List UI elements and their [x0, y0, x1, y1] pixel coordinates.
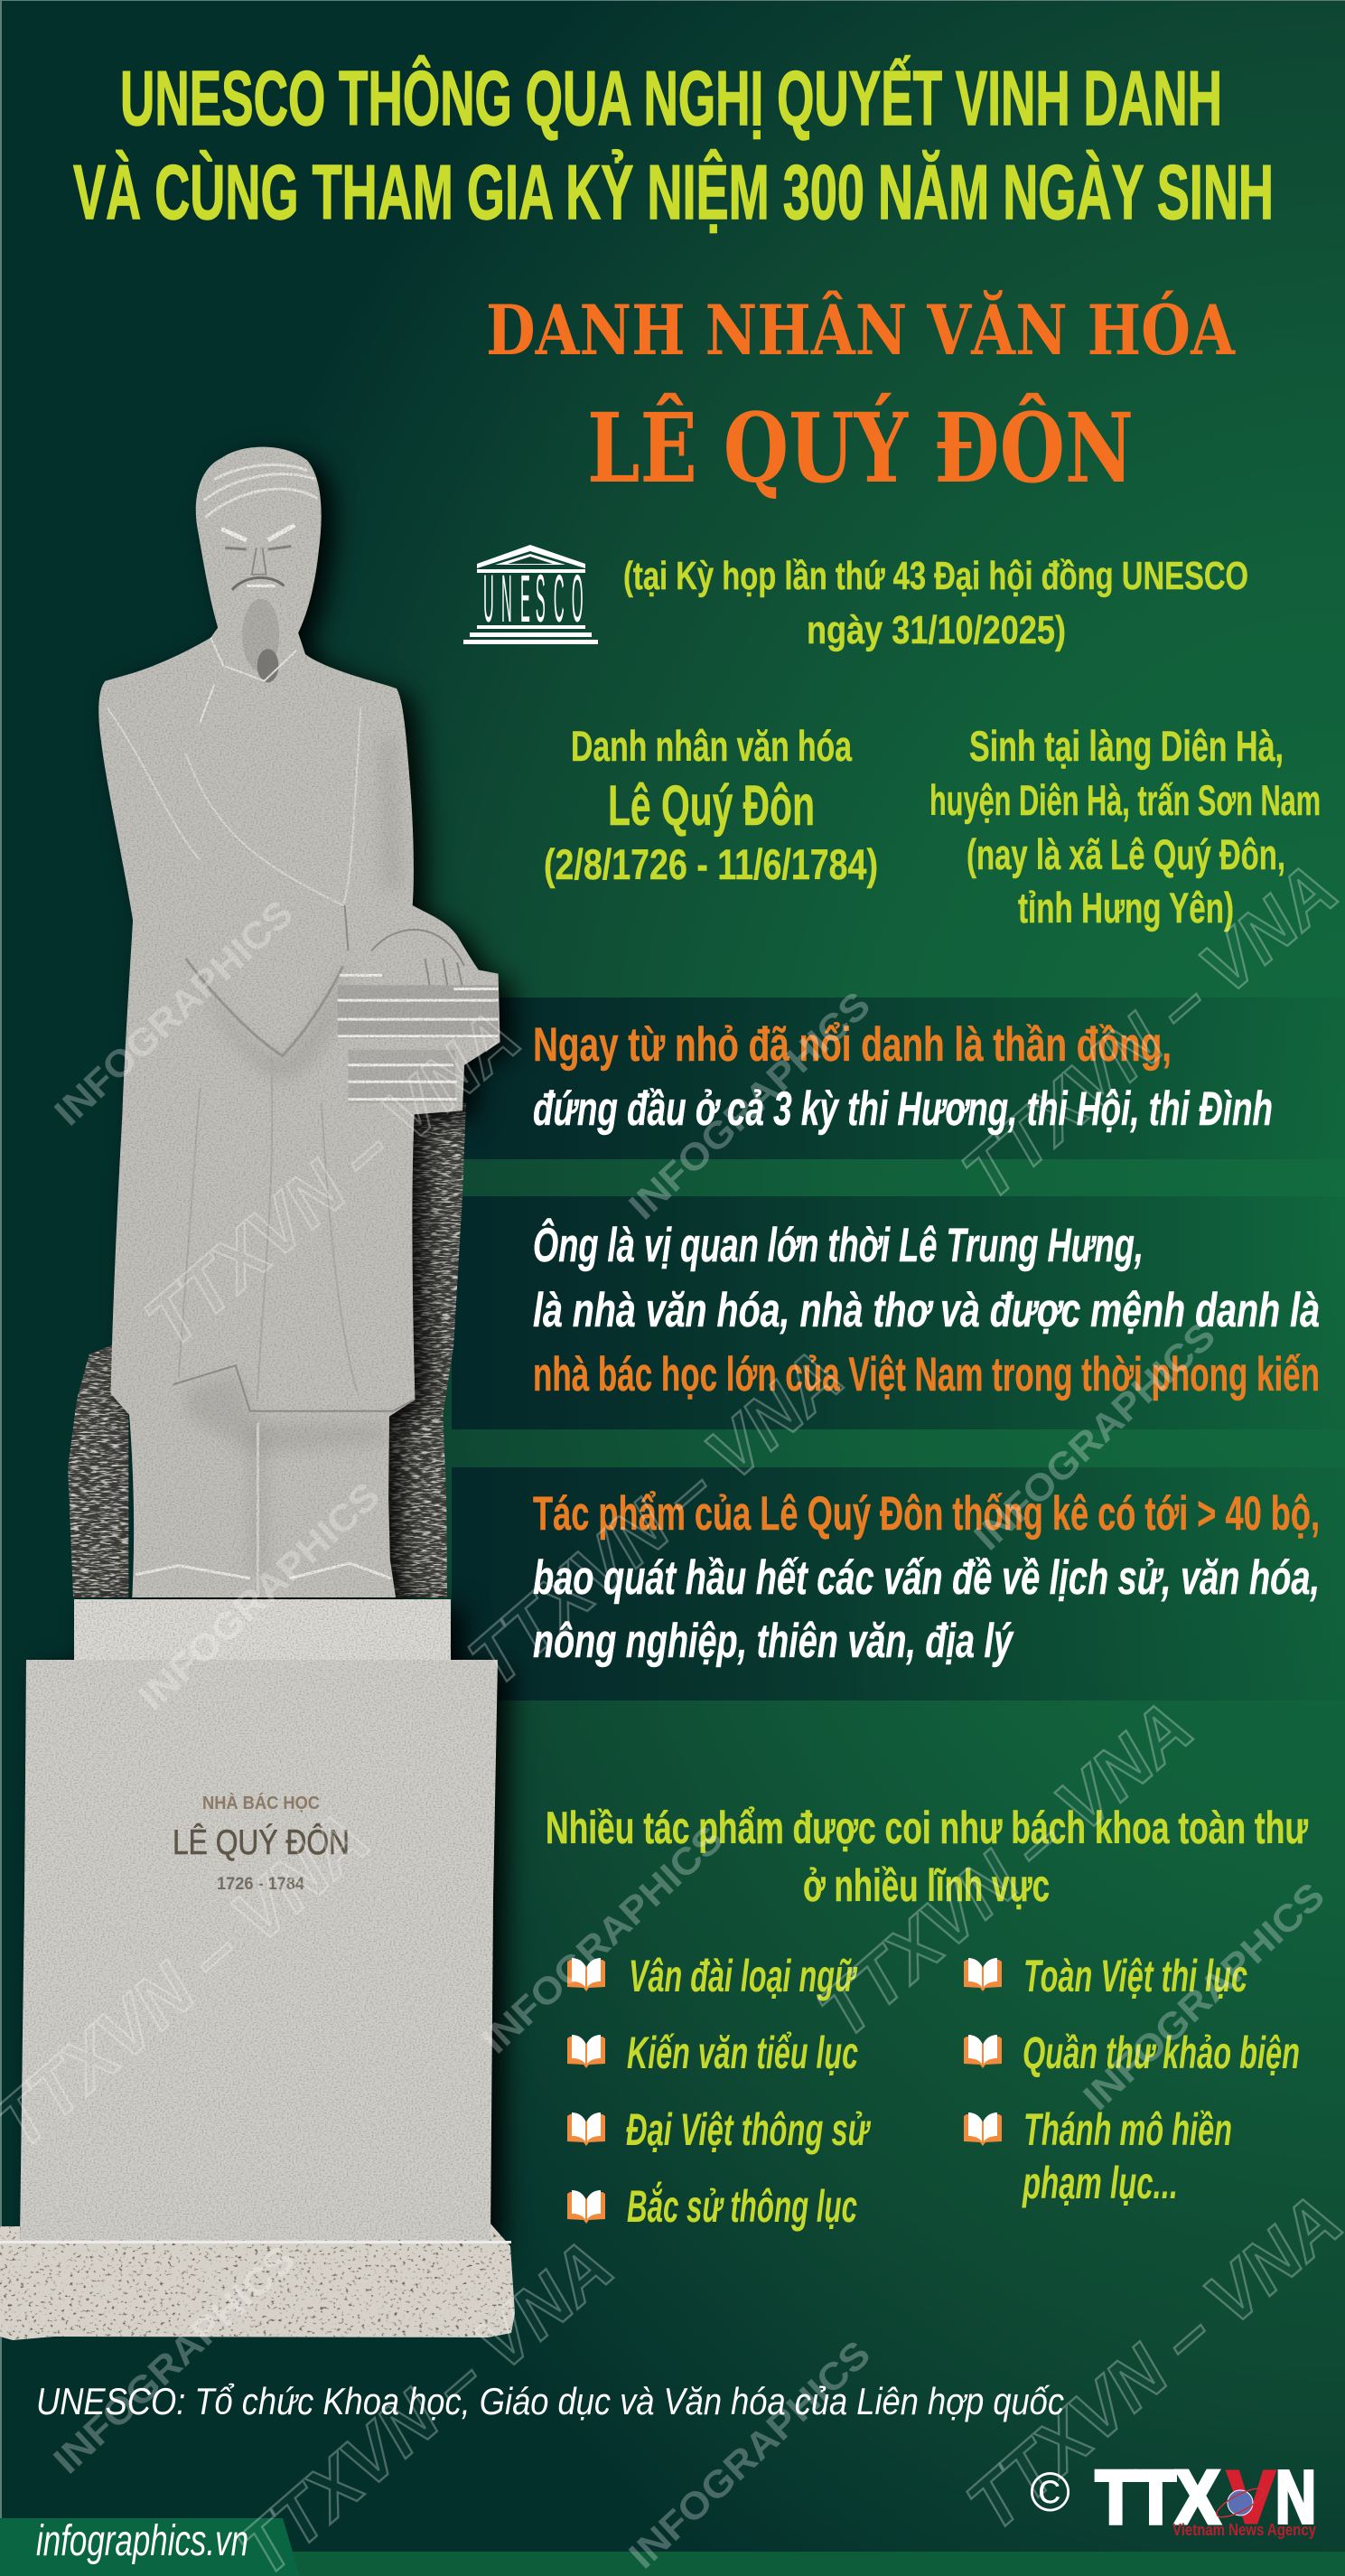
- text: birthplace: [929, 722, 1321, 932]
- footer band: [0, 2552, 1345, 2576]
- heading: encyclopedic works: ở nhiều lĩnh vực: [803, 1860, 1050, 1911]
- watermarks: [0, 848, 1345, 2576]
- statue: Lê Quý Đôn on pedestal: [0, 447, 515, 2340]
- footer tab: infographics.vn: infographics.vn: [36, 2517, 248, 2565]
- panel: body of works: nông nghiệp, thiên văn, địa lý: [533, 1615, 1014, 1668]
- text: name and life dates: Danh nhân văn hóa: [571, 722, 853, 770]
- logo: copyright TTXVN: N: [1275, 2455, 1316, 2539]
- list item: Toàn Việt thi lục: [964, 1951, 1247, 2001]
- upper plinth: [74, 1599, 451, 1660]
- panel: body of works: [452, 1467, 1345, 1700]
- watermarks: TTXVN – VNA: [130, 996, 535, 1363]
- logo: copyright TTXVN: [1030, 2455, 1316, 2539]
- heading: Danh nhân văn hóa Lê Quý Đôn: [486, 289, 1236, 504]
- watermarks: TTXVN – VNA: [453, 1335, 858, 1702]
- figure: [20, 447, 500, 2240]
- pedestal inscription: NHÀ BÁC HỌC: [202, 1793, 320, 1813]
- logo: copyright TTXVN: V: [1227, 2455, 1275, 2539]
- text: name and life dates: Lê Quý Đôn: [608, 774, 815, 838]
- watermarks: INFOGRAPHICS: [1075, 1874, 1332, 2119]
- list item: Vân đài loại ngữ: [567, 1951, 858, 2001]
- base slab: [0, 2224, 515, 2340]
- list item: Thánh mô hiền phạm lục: [964, 2104, 1232, 2208]
- watermarks: INFOGRAPHICS: [45, 2237, 303, 2482]
- heading: Danh nhân văn hóa Lê Quý Đôn: LÊ QUÝ ĐÔN: [587, 391, 1134, 504]
- footer tab: infographics.vn: [0, 2517, 300, 2576]
- watermarks: TTXVN – VNA: [803, 1686, 1208, 2054]
- logo: copyright TTXVN: Vietnam News Agency: [1172, 2521, 1316, 2539]
- turban and face: [203, 464, 317, 590]
- list item: Kiến văn tiểu lục: [567, 2028, 858, 2078]
- books: [338, 975, 499, 1103]
- footnote: UNESCO definition: UNESCO: Tổ chức Khoa học, Giáo dục và Văn hóa của Liên hợp quốc: [36, 2380, 1064, 2422]
- logo: copyright TTXVN: ©: [1030, 2461, 1070, 2523]
- text: name and life dates: [544, 722, 878, 888]
- list item: Bắc sử thông lục: Bắc sử thông lục: [627, 2181, 857, 2232]
- panel: official and scholar: [452, 1196, 1345, 1429]
- pedestal inscription: LÊ QUÝ ĐÔN: [173, 1822, 350, 1862]
- watermarks: INFOGRAPHICS: [473, 1817, 731, 2062]
- robe folds: [107, 638, 464, 1597]
- list item: Bắc sử thông lục: [567, 2181, 857, 2232]
- watermarks: INFOGRAPHICS: [46, 892, 301, 1134]
- pedestal block: [20, 1660, 498, 2240]
- icon: UNESCO logo: UNESCO: [483, 563, 584, 637]
- text: name and life dates: (2/8/1726 - 11/6/1784): [544, 840, 878, 888]
- pedestal inscription: [173, 1793, 350, 1894]
- watermarks: INFOGRAPHICS: [130, 1474, 388, 1719]
- list: works: [567, 1951, 1300, 2232]
- list item: Thánh mô hiền phạm lục: Thánh mô hiền: [1023, 2104, 1232, 2155]
- list item: Đại Việt thông sử: Đại Việt thông sử: [626, 2104, 872, 2155]
- title: UNESCO resolution headline: [73, 55, 1274, 236]
- pedestal inscription: 1726 - 1784: [217, 1875, 304, 1894]
- soft shading: [186, 738, 404, 1575]
- icon: UNESCO logo: [463, 545, 598, 644]
- text: session note: [623, 554, 1248, 652]
- text: birthplace: tỉnh Hưng Yên): [1018, 884, 1234, 932]
- list item: Đại Việt thông sử: [567, 2104, 872, 2155]
- watermarks: INFOGRAPHICS: [621, 983, 878, 1228]
- watermarks: INFOGRAPHICS: [966, 1314, 1223, 1559]
- watermarks: INFOGRAPHICS: [621, 2332, 878, 2576]
- text: session note: ngày 31/10/2025): [807, 608, 1066, 652]
- heading: encyclopedic works: [546, 1803, 1309, 1911]
- beard: [242, 599, 279, 682]
- list item: Vân đài loại ngữ: Vân đài loại ngữ: [629, 1951, 858, 2001]
- panel: child prodigy: [452, 998, 1345, 1159]
- list item: Kiến văn tiểu lục: Kiến văn tiểu lục: [627, 2028, 858, 2078]
- rock backing: [68, 1103, 466, 1597]
- list item: Thánh mô hiền phạm lục: phạm lục...: [1022, 2158, 1178, 2208]
- logo: copyright TTXVN: TTX: [1096, 2455, 1219, 2539]
